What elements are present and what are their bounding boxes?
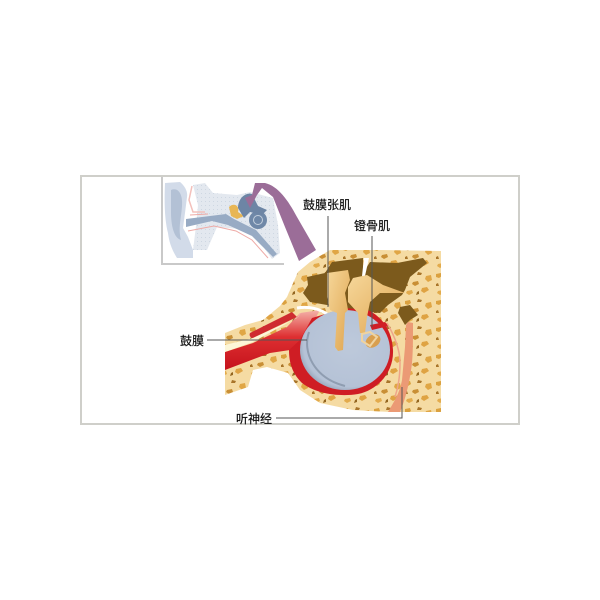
inset: temporal bone bbox=[193, 183, 280, 259]
red lining around tympanic cavity bbox=[289, 308, 393, 395]
stapedius muscle bbox=[370, 322, 389, 330]
ear cross-section diagram bbox=[225, 250, 441, 412]
leader line: 镫骨肌 bbox=[371, 236, 373, 327]
leader line: 鼓膜张肌 bbox=[327, 216, 329, 307]
label: 镫骨肌: 镫骨肌 bbox=[354, 218, 390, 233]
temporal bone bbox=[225, 250, 441, 412]
white gap in cavity bbox=[362, 258, 369, 276]
cochlear nerve bbox=[388, 322, 413, 412]
label: 鼓膜: 鼓膜 bbox=[180, 334, 204, 348]
label: 听神经: 听神经 bbox=[236, 412, 272, 426]
panel: outer frame bbox=[81, 176, 519, 424]
malleus bbox=[327, 270, 350, 351]
muscle: tensor tympani bbox=[250, 312, 297, 338]
inset: whole ear overview bbox=[162, 177, 316, 264]
stapes bbox=[362, 331, 383, 351]
eardrum bbox=[300, 310, 390, 390]
ear canal bbox=[225, 310, 320, 370]
inset: ossicles bbox=[229, 205, 244, 219]
inset: purple arrow bbox=[245, 183, 316, 261]
leader line: 鼓膜 bbox=[207, 339, 307, 341]
inset: ear canal bbox=[186, 214, 277, 257]
incus bbox=[348, 275, 405, 333]
inset frame bbox=[162, 177, 284, 264]
inset: cochlea bbox=[249, 211, 267, 229]
leader line: 听神经 bbox=[276, 387, 402, 418]
air cavity bbox=[303, 258, 427, 313]
inset: outer ear bbox=[165, 182, 193, 258]
label: 鼓膜张肌: 鼓膜张肌 bbox=[303, 198, 351, 212]
tympanic membrane white highlight bbox=[297, 307, 337, 323]
mastoid cavity bbox=[398, 305, 418, 325]
